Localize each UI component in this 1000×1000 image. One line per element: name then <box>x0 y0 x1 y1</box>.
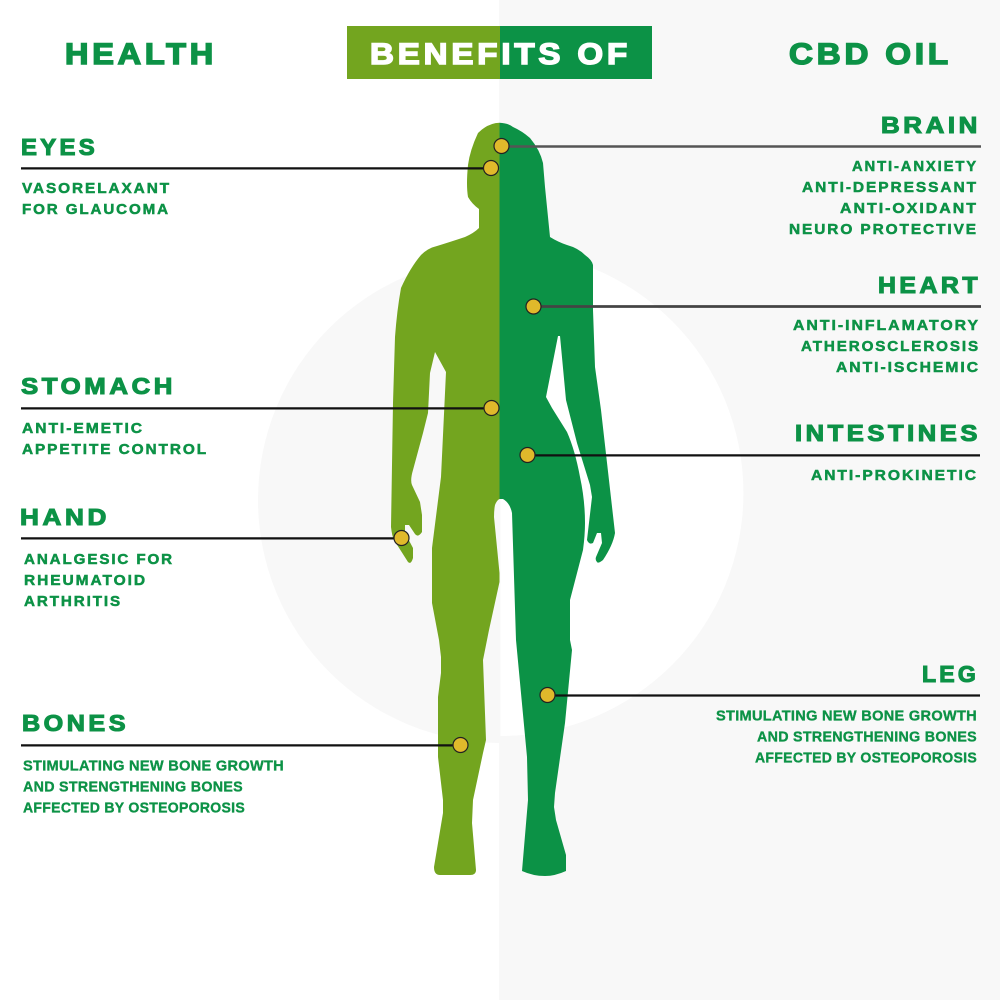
callout: brain <box>494 112 981 238</box>
right half of body <box>500 123 615 876</box>
title banner: BENEFITS OF <box>347 26 652 79</box>
callout: eyes <box>21 134 498 218</box>
callout: brain: ANTI-OXIDANT <box>840 201 978 217</box>
callout: leg <box>540 661 980 766</box>
body silhouette <box>391 123 615 876</box>
callout: leg: AFFECTED BY OSTEOPOROSIS <box>755 750 977 766</box>
callout: heart: ANTI-ISCHEMIC <box>836 360 980 376</box>
callout: hand <box>20 504 409 610</box>
title banner: BENEFITS OF: BENEFITS OF <box>370 38 631 71</box>
title: HEALTH: HEALTH <box>65 38 217 71</box>
callout: bones: STIMULATING NEW BONE GROWTH <box>23 758 284 774</box>
callout: bones <box>21 710 468 816</box>
callout: leg: AND STRENGTHENING BONES <box>757 730 977 746</box>
callout: stomach <box>21 373 499 458</box>
callout: bones: AFFECTED BY OSTEOPOROSIS <box>23 800 245 816</box>
callout: eyes: EYES <box>21 134 98 160</box>
callout: eyes: FOR GLAUCOMA <box>22 202 170 218</box>
callout: hand: ANALGESIC FOR <box>24 552 174 568</box>
callout: brain: ANTI-ANXIETY <box>852 159 978 175</box>
callout: bones: AND STRENGTHENING BONES <box>23 780 243 796</box>
callout: brain: BRAIN <box>881 112 981 138</box>
callout: intestines: INTESTINES <box>795 420 981 446</box>
callout: heart: HEART <box>878 272 981 298</box>
left half of body <box>391 123 500 875</box>
callout: eyes: VASORELAXANT <box>22 181 171 197</box>
title: CBD OIL: CBD OIL <box>789 38 952 71</box>
callout: leg: STIMULATING NEW BONE GROWTH <box>716 708 977 724</box>
callout: stomach: APPETITE CONTROL <box>22 442 208 458</box>
callout: heart <box>526 272 981 376</box>
callout: hand: RHEUMATOID <box>24 573 147 589</box>
callout: leg: LEG <box>922 661 979 687</box>
callout: hand: ARTHRITIS <box>24 594 122 610</box>
callout: heart: ATHEROSCLEROSIS <box>801 339 980 355</box>
callout: stomach: ANTI-EMETIC <box>22 421 144 437</box>
callout: stomach: STOMACH <box>21 373 176 399</box>
callout: brain: ANTI-DEPRESSANT <box>802 180 978 196</box>
callout: hand: HAND <box>20 504 110 530</box>
callout: intestines: ANTI-PROKINETIC <box>811 468 978 484</box>
callout: bones: BONES <box>22 710 129 736</box>
callout: heart: ANTI-INFLAMATORY <box>793 318 980 334</box>
callout: brain: NEURO PROTECTIVE <box>789 222 978 238</box>
callout: intestines <box>520 420 981 484</box>
